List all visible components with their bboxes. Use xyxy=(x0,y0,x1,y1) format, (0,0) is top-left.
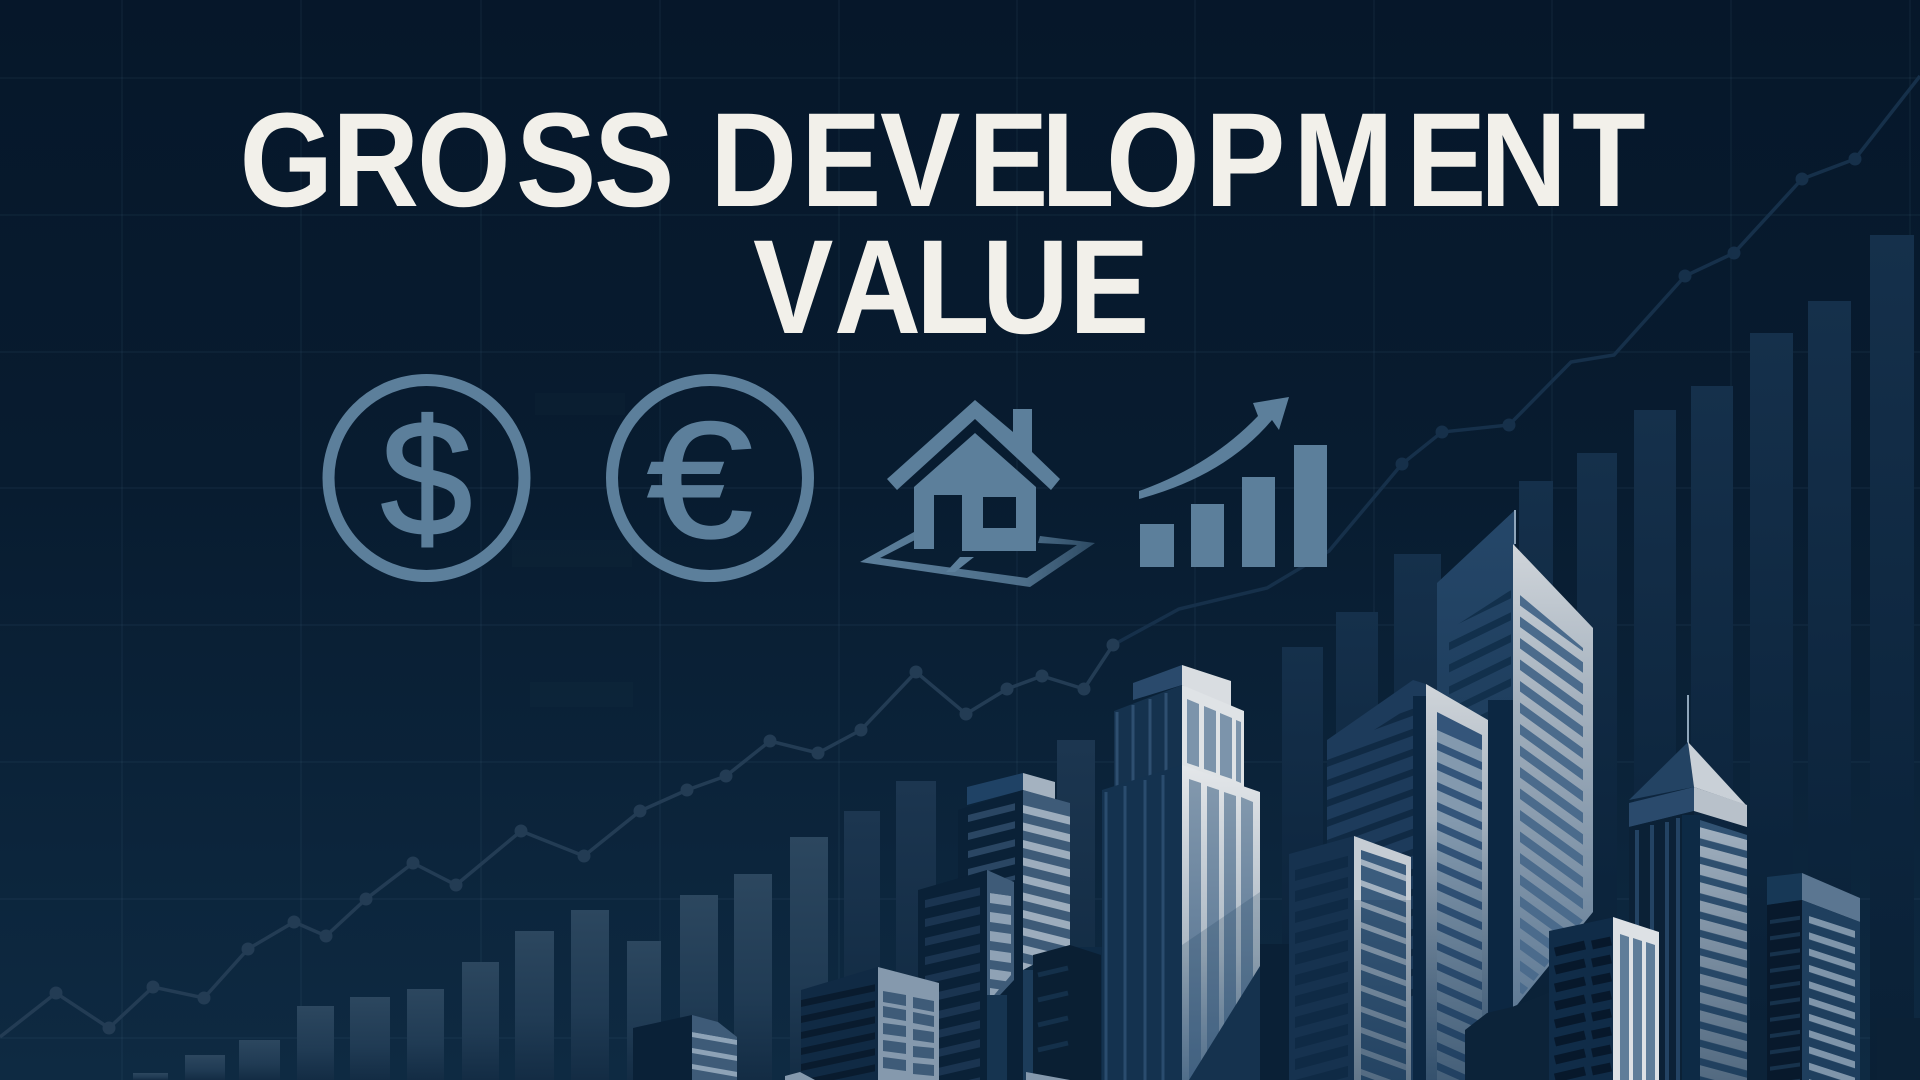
building: right pointed tower xyxy=(1629,695,1747,1080)
building: upper left tower xyxy=(958,773,1070,1080)
building: far right block xyxy=(1767,873,1860,1080)
building: bottom edge rooftops xyxy=(785,1072,1070,1080)
building: front mid-rise xyxy=(1289,836,1411,1080)
title: GROSS DEVELOPMENT xyxy=(239,86,1646,235)
building: tallest tower xyxy=(1437,510,1593,1080)
icon: euro coin xyxy=(612,380,808,576)
building: bottom left block xyxy=(633,1015,737,1080)
icon: dollar coin xyxy=(328,380,524,576)
building: stepped front tower xyxy=(1102,665,1260,1080)
building: dark shadow block at the tower base xyxy=(1465,992,1550,1080)
icon: euro coin: € xyxy=(647,388,753,572)
building: small front right block xyxy=(1549,917,1659,1080)
building silhouettes behind xyxy=(1070,944,1920,1080)
building: bottom centre block xyxy=(801,967,939,1080)
icon: dollar coin: $ xyxy=(381,386,472,570)
title: VALUE xyxy=(753,213,1149,362)
title xyxy=(239,86,1646,362)
building: dark foreground block xyxy=(1033,945,1101,1080)
bar chart: rising background bars xyxy=(133,235,1914,1080)
building: second tower xyxy=(1327,680,1488,1080)
building: mid left tower xyxy=(918,870,1014,1080)
icon: house on a land plot xyxy=(860,400,1095,587)
icon: growth bars with arrow xyxy=(1139,397,1327,567)
